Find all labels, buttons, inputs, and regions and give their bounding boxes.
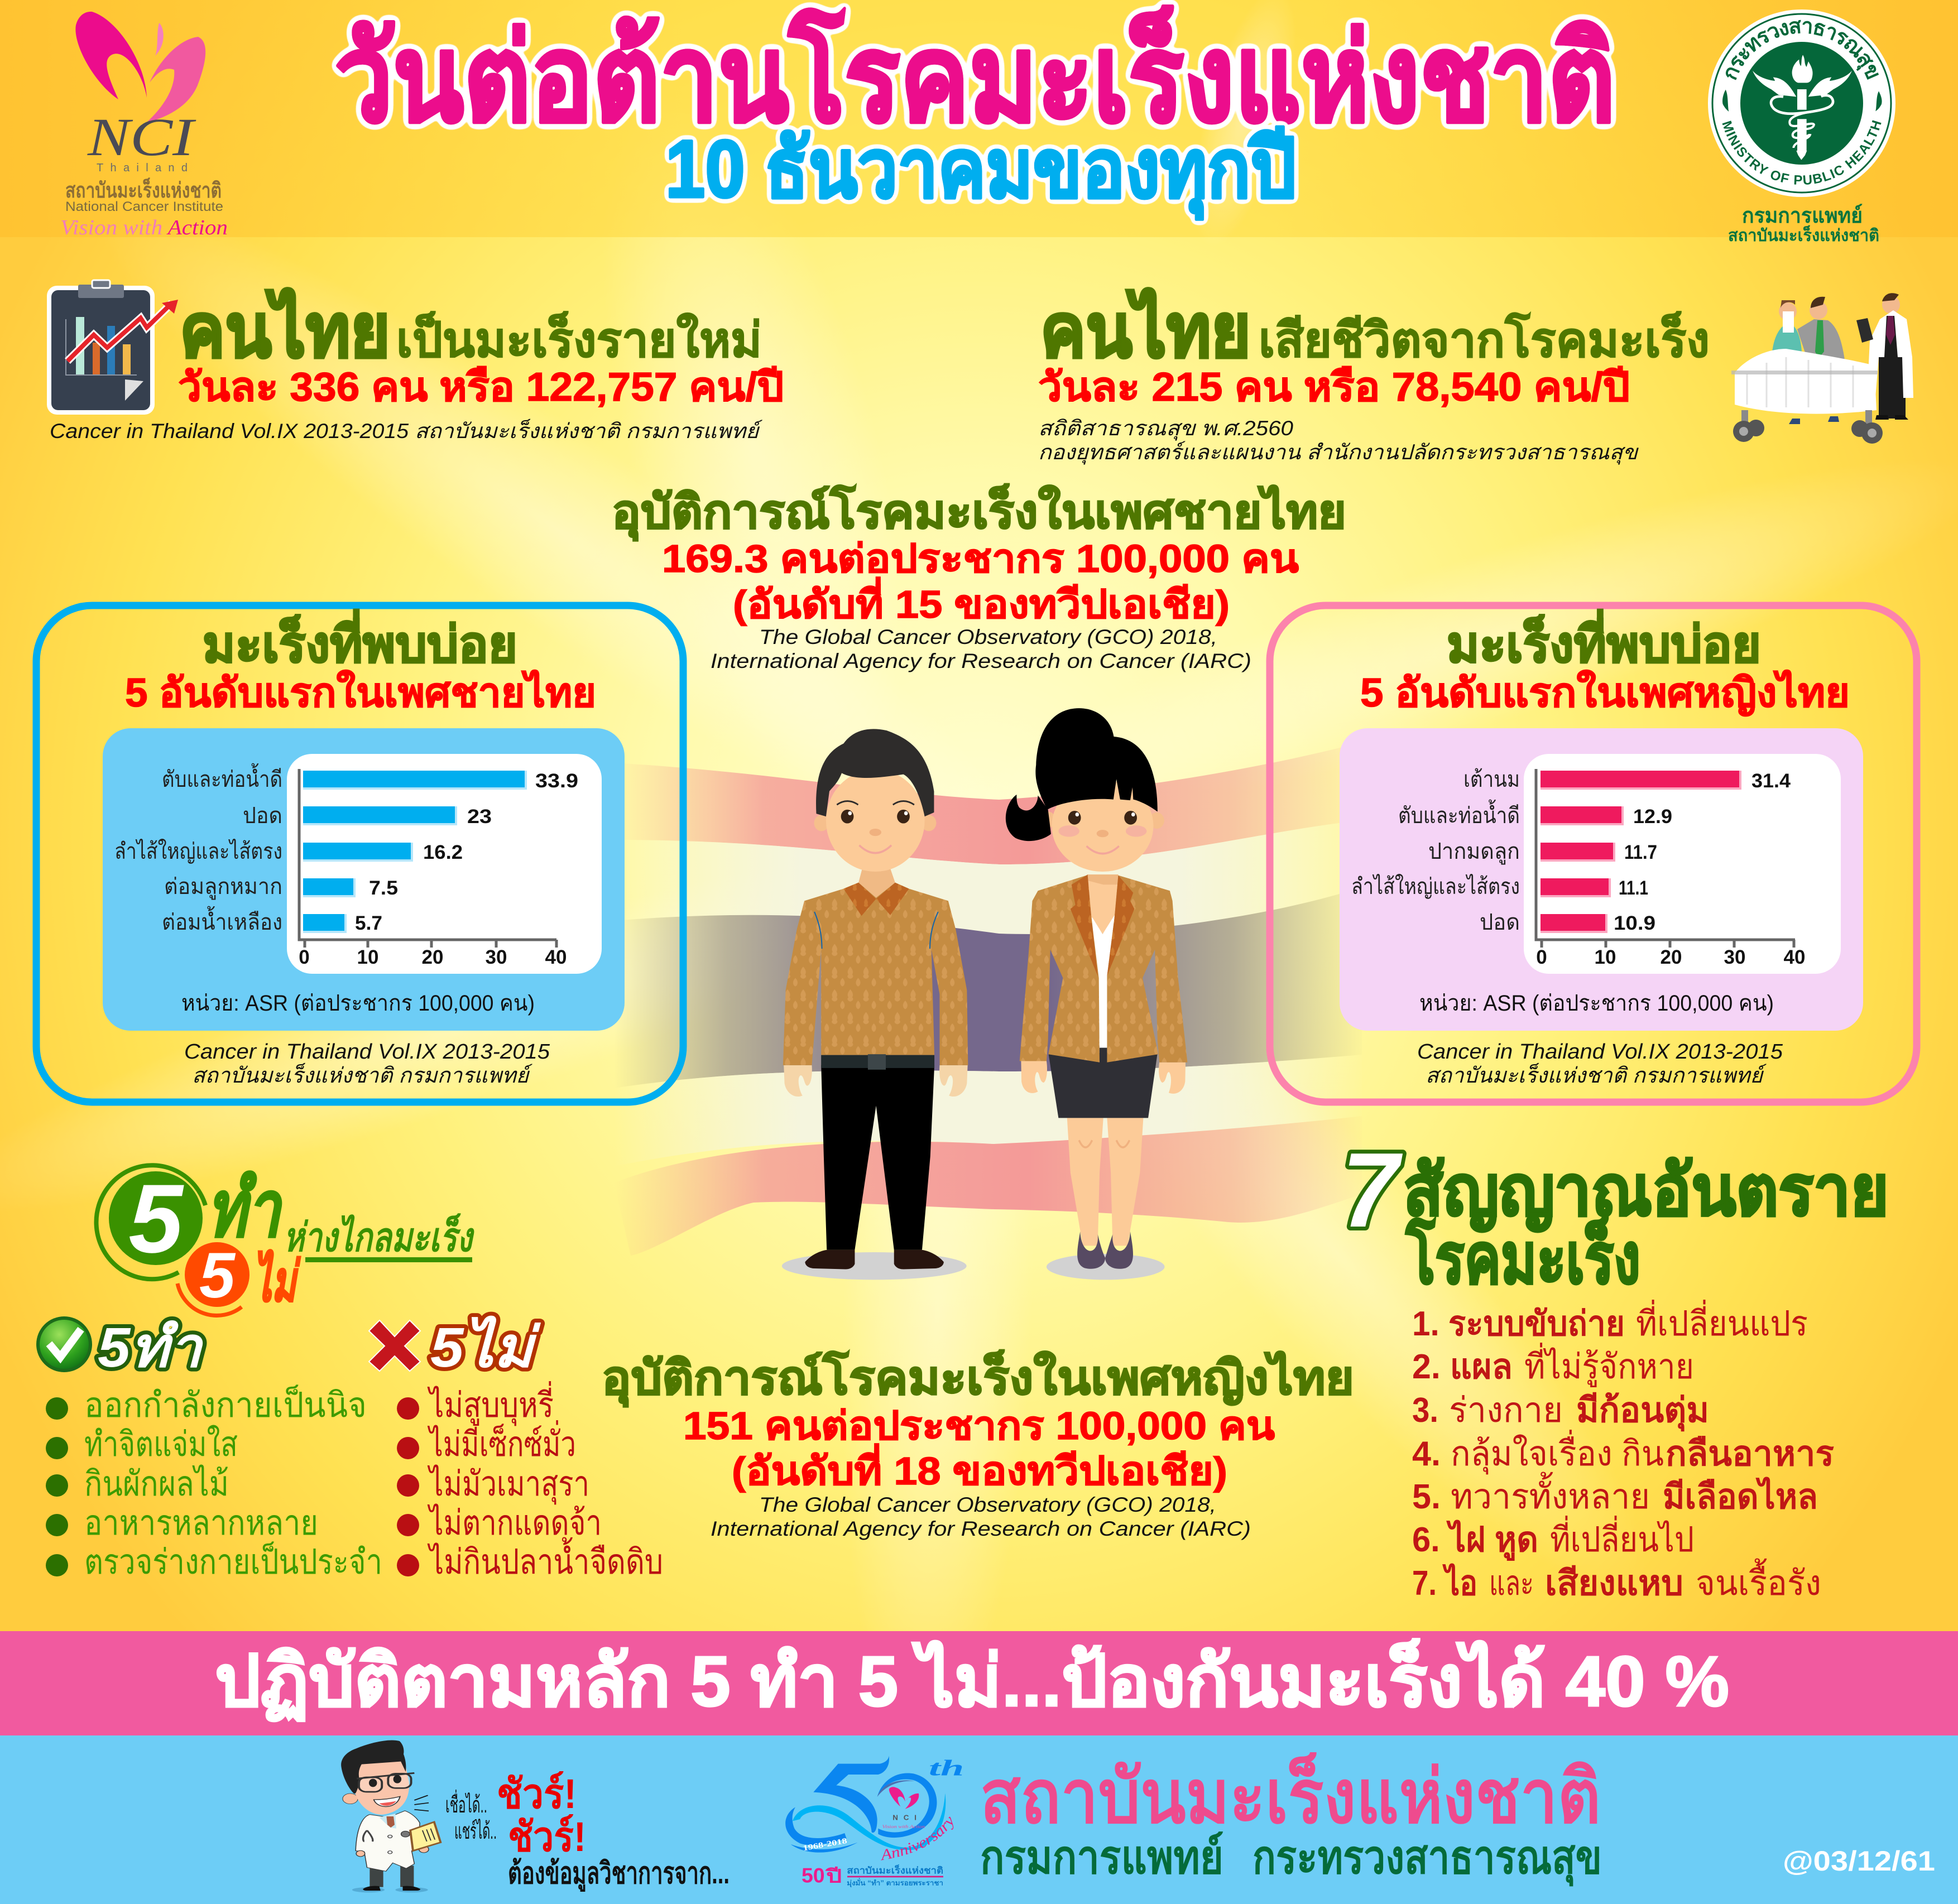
list text [84,1384,382,1581]
figures: วันละ 215 คน หรือ 78,540 คน/ปี [1038,365,1630,410]
bar chart: women: 0 [1536,946,1547,968]
bullets [397,1397,419,1576]
logo: 50th anniversary: Vision with Action [882,1824,925,1829]
bar chart: men: ต่อมน้ำเหลือง [162,906,282,935]
sign list: ที่เปลี่ยนไป [1550,1516,1694,1559]
bar chart: men: 0 [299,946,310,968]
tagline: trust: ชัวร์! [508,1814,586,1860]
list text: ไม่กินปลาน้ำจืดดิบ [427,1537,663,1581]
stat: new cases [50,288,784,443]
list text: ไม่สูบบุหรี่ [427,1381,554,1426]
department caption: กรมการแพทย์ [1742,204,1863,228]
headline badge: 5 do 5 don't [96,1165,475,1315]
heading remainder: เป็นมะเร็งรายใหม่ [396,311,762,367]
rank: (อันดับที่ 18 ของทวีปเอเชีย) [732,1443,1227,1493]
orange 5 badge: 5 [199,1240,236,1311]
panel: 7 warning signs [1342,1131,1889,1603]
figures: วันละ 336 คน หรือ 122,757 คน/ปี [178,365,784,410]
department caption: สถาบันมะเร็งแห่งชาติ [1728,225,1879,245]
list text: ออกกำลังกายเป็นนิจ [84,1384,367,1425]
seal ring text top: กระทรวงสาธารณสุข [1726,20,1879,80]
NCI script: NCI [87,107,196,167]
department caption [1728,204,1879,245]
heading: มะเร็งที่พบบ่อย [1447,609,1761,673]
chart panel [1340,728,1863,1031]
source [1038,417,1639,465]
sign list: และ [1489,1564,1534,1603]
source: Cancer in Thailand Vol.IX 2013-2015 สถาบันมะเร็งแห่งชาติ กรมการแพทย์ [50,419,762,443]
unit note: หน่วย: ASR (ต่อประชากร 100,000 คน) [1419,991,1774,1016]
logo: 50th anniversary [785,1756,964,1887]
logo: 50th anniversary: สถาบันมะเร็งแห่งชาติ [847,1864,943,1876]
heading: มะเร็งที่พบบ่อย [203,609,517,673]
bar chart: men: 20 [422,946,443,968]
icon: clipboard chart [47,280,178,415]
green 5 badge [96,1165,205,1279]
source [711,626,1251,672]
man [782,729,968,1280]
source: สถาบันมะเร็งแห่งชาติ กรมการแพทย์ [192,1062,533,1088]
logo: 50th anniversary: NCI [892,1814,916,1822]
sign list: 3. [1412,1391,1438,1430]
source: สถิติสาธารณสุข พ.ศ.2560 [1038,417,1293,441]
bar chart: women: 20 [1661,946,1682,968]
panel: top 5 cancers in Thai women [1270,605,1917,1102]
department names: กระทรวงสาธารณสุข [1252,1831,1602,1887]
tagline: ห่างไกลมะเร็ง [284,1213,475,1260]
source [1417,1040,1783,1088]
date stamp: @03/12/61 [1783,1845,1935,1877]
tagline: trust [445,1771,730,1892]
logo: Ministry of Public Health seal [1708,9,1895,197]
Thai name: สถาบันมะเร็งแห่งชาติ [65,177,222,203]
title: อุบัติการณ์โรคมะเร็งในเพศชายไทย [612,483,1346,541]
subheading: 5ทำ [98,1316,204,1379]
bar chart: women: 12.9 [1633,806,1672,828]
list text: ไม่มีเซ็กซ์มั่ว [427,1420,576,1464]
orange label: ไม่ [253,1249,301,1313]
panel: 5 don't list [369,1315,663,1581]
tagline: trust: แชร์ได้.. [454,1819,497,1844]
sign list: ทวารทั้งหลาย [1451,1472,1650,1516]
heading [1403,1151,1889,1298]
list text: ไม่ตากแดดจ้า [427,1503,602,1542]
source: International Agency for Research on Cancer (IARC) [711,1517,1251,1540]
unit note: หน่วย: ASR (ต่อประชากร 100,000 คน) [181,991,535,1016]
bar chart: women: ปากมดลูก [1428,839,1520,864]
title: อุบัติการณ์โรคมะเร็งในเพศหญิงไทย [602,1349,1354,1407]
sign list: 4. [1412,1435,1441,1473]
subheading: 5ไม่ [430,1315,541,1379]
tagline: trust: ชัวร์! [497,1771,577,1817]
stat: deaths [1038,288,1710,465]
source: Cancer in Thailand Vol.IX 2013-2015 [1417,1040,1783,1064]
orange 5 badge [177,1240,249,1315]
logo: National Cancer Institute [60,12,228,239]
bar chart: men: 30 [486,946,507,968]
footer band [0,1735,1958,1904]
bar chart: women: ลำไส้ใหญ่และไส้ตรง [1351,873,1520,899]
bar chart: women: 30 [1724,946,1745,968]
bar chart: men: 5.7 [355,912,382,934]
logo: 50th anniversary: มุ่งมั่น “ทำ” ตามรอยพระราชา [847,1877,943,1887]
sign list: ร่างกาย [1449,1391,1563,1430]
tagline: trust: เชื่อได้.. [445,1790,487,1818]
bar chart: women: 40 [1784,946,1805,968]
green 5 badge: 5 [128,1165,184,1273]
list text: ไม่มัวเมาสุรา [427,1464,589,1504]
organisation name: สถาบันมะเร็งแห่งชาติ [980,1752,1601,1839]
illustration: man and woman in batik [782,708,1187,1280]
heading: คนไทย [1040,288,1251,373]
sign list: เสียงแหบ [1545,1564,1683,1603]
sign list: มีก้อนตุ่ม [1576,1391,1709,1431]
sign list: กลุ้มใจเรื่อง กิน [1451,1430,1664,1474]
source: The Global Cancer Observatory (GCO) 2018, [759,1493,1216,1516]
icon: patient on stretcher with family and doctor [1731,293,1913,444]
bar chart: women: 10 [1595,946,1616,968]
sign list: 6. ไฝ หูด [1412,1520,1538,1561]
bar chart: men: ปอด [243,804,282,828]
list text: กินผักผลไม้ [84,1464,229,1503]
sign list: มีเลือดไหล [1663,1477,1818,1516]
source [711,1493,1251,1540]
bar chart: women: ปอด [1480,910,1520,935]
subtitle: 10 ธันวาคมของทุกปี [665,123,1296,220]
bar chart: men: ลำไส้ใหญ่และไส้ตรง [114,838,282,864]
Thailand: Thailand [97,162,188,174]
icon: red cross [369,1320,420,1371]
bar chart: women: 31.4 [1751,770,1791,792]
list text [427,1381,663,1581]
source [184,1040,550,1088]
bar chart: men: ตับและท่อน้ำดี [162,763,282,792]
heading: สัญญาณอันตราย [1403,1151,1889,1232]
department names: กรมการแพทย์ [980,1831,1223,1883]
seal ring text bottom: MINISTRY OF PUBLIC HEALTH [1722,120,1882,185]
Thai flag backdrop [614,742,1362,1256]
heading remainder: เสียชีวิตจากโรคมะเร็ง [1259,311,1710,367]
sign list: 1. ระบบขับถ่าย [1412,1305,1625,1343]
sign list: กลืนอาหาร [1666,1435,1834,1473]
list text: อาหารหลากหลาย [84,1504,318,1542]
department names [980,1831,1602,1887]
rate: 151 คนต่อประชากร 100,000 คน [683,1404,1275,1448]
list text: ตรวจร่างกายเป็นประจำ [84,1541,382,1581]
banner: key message: ปฏิบัติตามหลัก 5 ทำ 5 ไม่...ป้องกันมะเร็งได้ 40 % [215,1638,1729,1722]
logo: 50th anniversary: 50 [802,1864,825,1887]
bar chart: women: 11.1 [1619,877,1648,899]
bar chart: men: 23 [467,806,492,828]
numeral 7: 7 [1342,1131,1403,1249]
bar chart: men: 10 [357,946,378,968]
sign list: ที่เปลี่ยนแปร [1636,1300,1808,1343]
subheading: 5 อันดับแรกในเพศชายไทย [125,669,596,715]
rank: (อันดับที่ 15 ของทวีปเอเชีย) [733,576,1230,626]
logo: 50th anniversary: ปี [824,1865,842,1887]
icon: check mark [36,1316,92,1372]
green label: ทำ [207,1165,282,1253]
title: วันต่อต้านโรคมะเร็งแห่งชาติ [335,6,1615,147]
bullets [46,1397,68,1576]
bar chart: men: 40 [545,946,567,968]
tagline: trust: ต้องข้อมูลวิชาการจาก... [508,1857,730,1892]
source: กองยุทธศาสตร์และแผนงาน สำนักงานปลัดกระทรวงสาธารณสุข [1038,441,1639,465]
source: สถาบันมะเร็งแห่งชาติ กรมการแพทย์ [1426,1062,1767,1088]
panel: 5 do list [36,1316,382,1581]
sign list: จนเรื้อรัง [1696,1558,1821,1603]
woman [1006,708,1187,1280]
slogan: Vision with Action [60,216,228,239]
seal emblem: caduceus [1722,55,1882,160]
logo: 50th anniversary: 1968-2018 [803,1837,848,1853]
bar chart: women: ตับและท่อน้ำดี [1398,799,1520,828]
sign list [1412,1300,1834,1603]
sign list: 5. [1412,1478,1441,1516]
heading: โรคมะเร็ง [1405,1217,1640,1298]
bar chart: women [1351,767,1805,968]
source: The Global Cancer Observatory (GCO) 2018, [759,626,1217,648]
heading: female incidence [602,1349,1354,1540]
banner: key message [0,1631,1958,1735]
bar chart: men: 16.2 [423,842,463,863]
bar chart: men: ต่อมลูกหมาก [164,874,282,900]
icon: pink butterfly [75,12,205,123]
subheading: 5 อันดับแรกในเพศหญิงไทย [1360,669,1850,717]
source: Cancer in Thailand Vol.IX 2013-2015 [184,1040,550,1064]
rate: 169.3 คนต่อประชากร 100,000 คน [662,537,1299,580]
list text: ทำจิตแจ่มใส [84,1425,238,1464]
illustration: cartoon doctor [341,1740,440,1892]
bar chart: men [114,763,578,968]
source: International Agency for Research on Cancer (IARC) [711,650,1251,672]
logo: 50th anniversary: Anniversary [881,1817,953,1860]
heading: male incidence [612,483,1346,672]
sign list: ที่ไม่รู้จักหาย [1524,1343,1694,1387]
bar chart: women: 11.7 [1624,842,1657,863]
chart panel [103,728,625,1031]
sign list: 7. ไอ [1412,1563,1477,1603]
sign list: 2. แผล [1412,1348,1513,1386]
bar chart: women: 10.9 [1614,912,1655,934]
bar chart: men: 7.5 [369,877,398,899]
English name: National Cancer Institute [65,199,223,214]
heading: คนไทย [180,288,390,373]
bar chart: women: เต้านม [1463,767,1520,792]
panel: top 5 cancers in Thai men [36,605,683,1102]
logo: 50th anniversary: th [929,1756,964,1781]
bar chart: men: 33.9 [535,770,578,792]
